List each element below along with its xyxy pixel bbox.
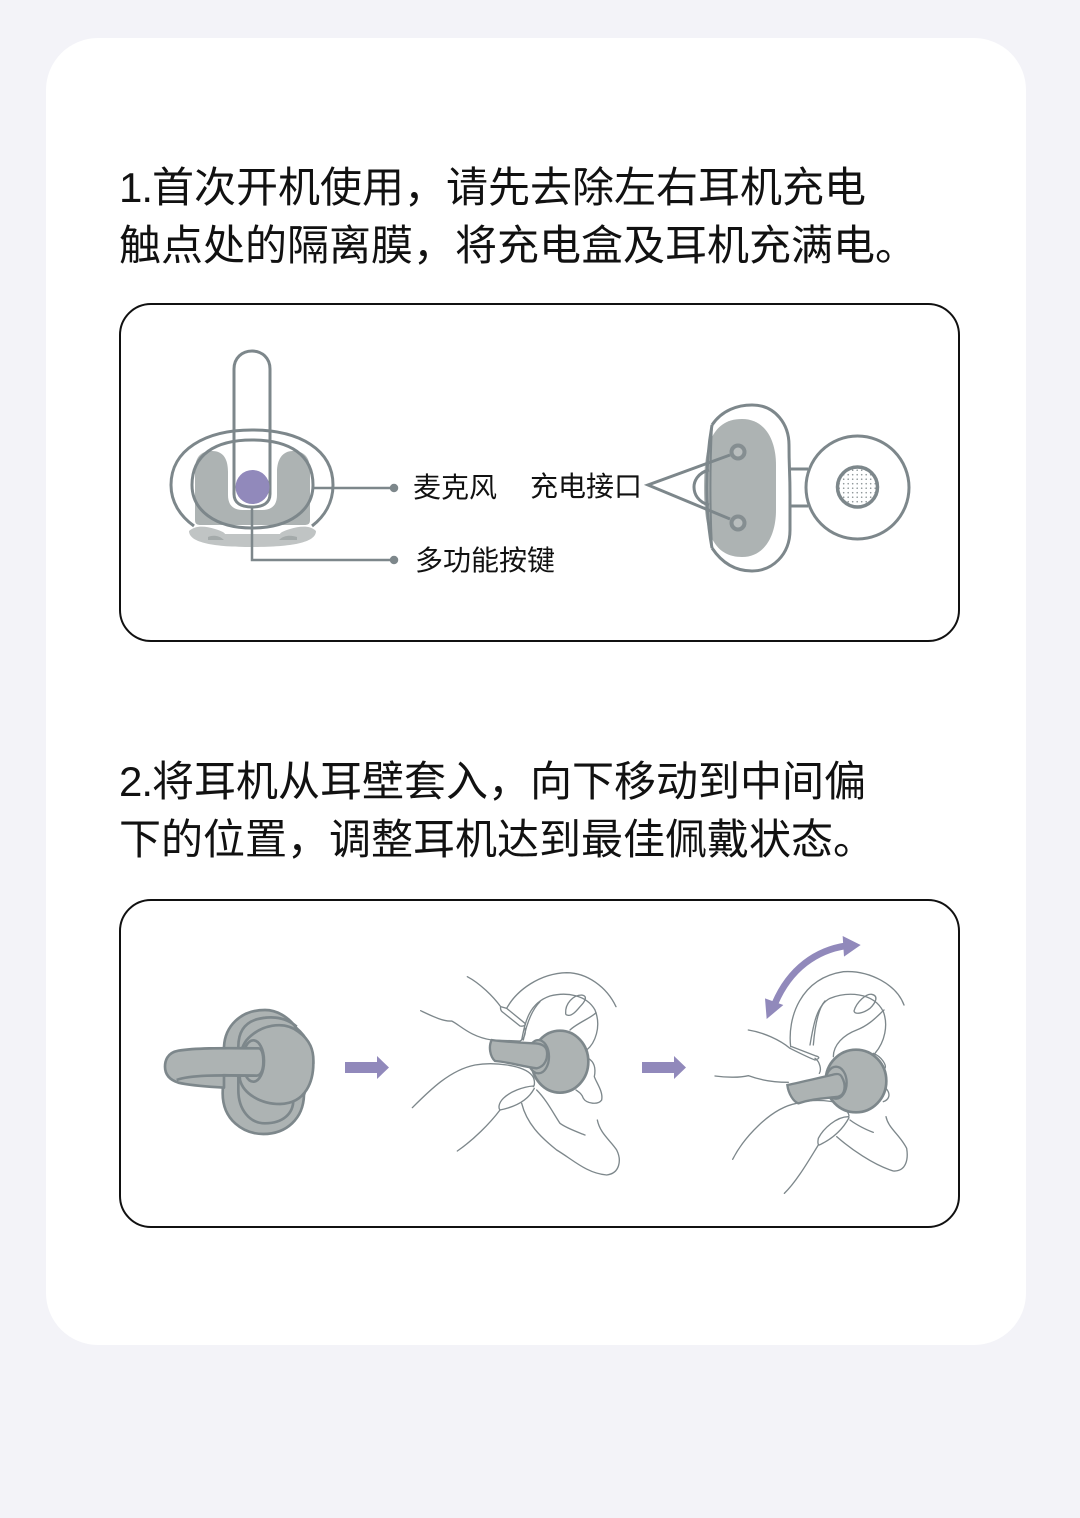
- heading: step 2: 下的位置，调整耳机达到最佳佩戴状态。: [119, 816, 875, 863]
- heading: step 2: 2.将耳机从耳壁套入，向下移动到中间偏: [119, 758, 866, 805]
- icon: earbud side view: [648, 405, 909, 571]
- heading: step 1: 1.首次开机使用，请先去除左右耳机充电: [119, 164, 866, 211]
- heading: step 2: [119, 758, 875, 863]
- illustration: hand placing earbud on ear: [412, 973, 619, 1175]
- illustration: adjusting earbud on ear: [715, 972, 907, 1193]
- label: microphone: 麦克风: [413, 472, 497, 503]
- arrow: second: [642, 1056, 686, 1079]
- icon: earbud front view: [171, 351, 333, 547]
- panel: step 1 frame: [119, 303, 960, 642]
- label: multifunction button: 多功能按键: [415, 545, 555, 576]
- panel: step 2 frame: [119, 899, 960, 1228]
- heading: step 1: [119, 164, 917, 269]
- arrow: adjust double arrow: [765, 936, 861, 1019]
- label: charging port: 充电接口: [530, 471, 642, 502]
- arrow: first: [345, 1056, 389, 1079]
- icon: earbud with ear hook: [165, 1010, 313, 1134]
- callout lines: left earbud: [252, 485, 397, 563]
- heading: step 1: 触点处的隔离膜，将充电盒及耳机充满电。: [119, 222, 917, 269]
- white card: [46, 38, 1026, 1345]
